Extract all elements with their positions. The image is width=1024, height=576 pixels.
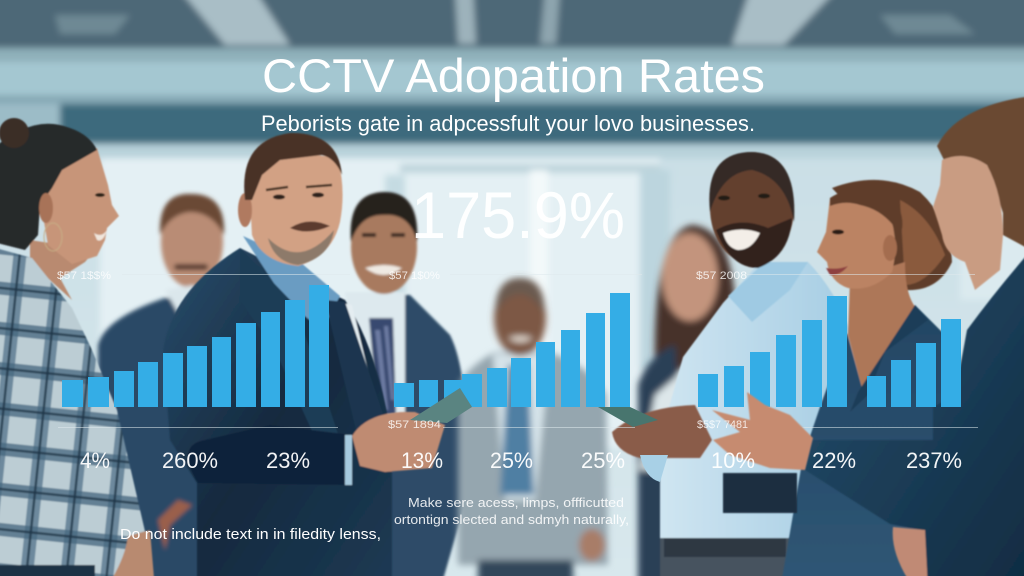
- note: right caption: [394, 495, 629, 527]
- percentage labels: 4%: [80, 448, 110, 473]
- person: centre hand holding tablet: [612, 405, 712, 458]
- note: left caption: Do not include text in in filedity lenss,: [120, 526, 381, 543]
- bar chart: group 3: [698, 296, 961, 407]
- note: right caption: Make sere acess, limps, offficutted: [408, 495, 624, 510]
- icon: phone in left hand: [410, 388, 472, 423]
- title: CCTV Adopation Rates: [262, 49, 765, 102]
- percentage labels: [80, 448, 962, 473]
- person: back left man (blurred): [98, 194, 224, 576]
- person: gesturing hand of right woman: [712, 392, 813, 470]
- percentage labels: 13%: [401, 448, 443, 473]
- percentage labels: 22%: [812, 448, 856, 473]
- person: back centre man (blurred): [458, 278, 608, 576]
- guide line: lower rule: [58, 427, 978, 428]
- icon: tablet in centre hand: [598, 407, 658, 427]
- small chart labels: $5$7 7481: [697, 419, 748, 431]
- person: back man with striped tie: [335, 192, 466, 576]
- small chart labels: $57 1$$%: [57, 270, 111, 282]
- guide line: upper rule: [122, 274, 975, 275]
- person: man in light blue shirt: [660, 152, 850, 576]
- note: right caption: ortontign slected and sdmyh naturally,: [394, 512, 629, 527]
- small chart labels: $57 2008: [696, 270, 747, 282]
- small chart labels: $57 1894: [388, 419, 441, 431]
- detail: dark jacket hem behind gesture: [723, 473, 797, 513]
- person: woman with brown updo: [780, 180, 952, 576]
- person: back woman with dark hair (blurred): [638, 225, 735, 576]
- percentage labels: 237%: [906, 448, 962, 473]
- percentage labels: 25%: [581, 448, 625, 473]
- detail: shirt cuff: [640, 455, 668, 482]
- bar chart: group 2: [394, 293, 630, 407]
- person: main man in navy suit: [163, 133, 445, 576]
- bar chart: group 1: [62, 285, 329, 407]
- percentage labels: 10%: [711, 448, 755, 473]
- subtitle: Peborists gate in adpcessfult your lovo businesses.: [261, 111, 755, 136]
- person: right woman in navy jacket: [805, 95, 1024, 576]
- small chart labels: [57, 270, 748, 431]
- person: left woman in plaid shirt: [0, 118, 155, 576]
- percentage labels: 25%: [490, 448, 533, 473]
- small chart labels: $57 1$0%: [389, 270, 440, 282]
- percentage labels: 23%: [266, 448, 310, 473]
- headline stat: 175.9%: [411, 178, 625, 252]
- percentage labels: 260%: [162, 448, 218, 473]
